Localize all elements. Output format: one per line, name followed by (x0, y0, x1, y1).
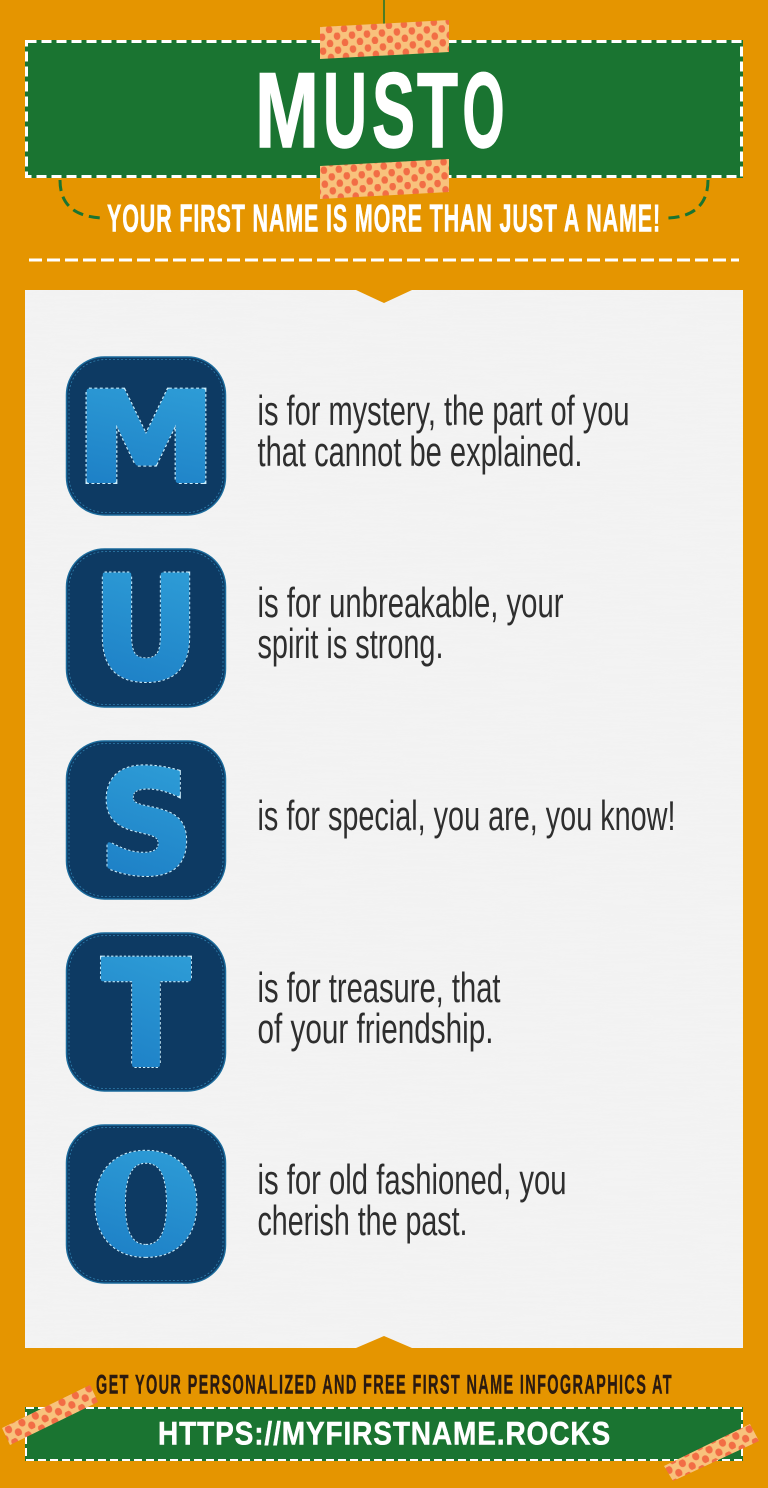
text: O line: cherish the past. (258, 1197, 468, 1244)
footer banner (25, 1407, 743, 1461)
title: O (462, 50, 504, 170)
panel: letters (25, 290, 743, 1348)
icon: letter M tile: M (76, 367, 216, 511)
row T (66, 930, 501, 1100)
title (255, 50, 504, 170)
row O (66, 1125, 566, 1285)
text: M line: that cannot be explained. (258, 428, 582, 475)
title: S (372, 50, 415, 170)
title banner (25, 40, 743, 178)
tape: footer left (2, 1385, 98, 1445)
header string (383, 0, 385, 26)
icon: letter T tile: T (102, 930, 190, 1100)
icon: letter S tile: S (99, 742, 194, 906)
row M (66, 357, 630, 515)
icon: letter U tile: U (92, 547, 200, 712)
tape: top (320, 20, 449, 59)
right dashed connector (668, 180, 708, 218)
icon: letter T tile: T (102, 930, 190, 1100)
icon: letter O tile: O (92, 1126, 200, 1285)
icon: letter S tile (66, 741, 226, 906)
row S (66, 741, 676, 906)
title: U (323, 50, 367, 170)
icon: letter U tile: U (92, 547, 200, 712)
text: O line: is for old fashioned, you (258, 1156, 566, 1203)
left dashed connector (60, 180, 103, 218)
icon: letter S tile: S (99, 742, 194, 906)
row U (66, 547, 564, 712)
title: M (255, 50, 319, 170)
dashed divider (29, 258, 739, 262)
text: T line: is for treasure, that (258, 964, 501, 1011)
footer url: HTTPS://MYFIRSTNAME.ROCKS (158, 1416, 611, 1452)
tape: footer right (664, 1424, 759, 1481)
text: U line: spirit is strong. (258, 620, 444, 667)
icon: letter O tile: O (92, 1126, 200, 1285)
text: T line: of your friendship. (258, 1005, 494, 1052)
icon: letter M tile: M (76, 367, 216, 511)
icon: letter T tile (66, 930, 226, 1100)
tape: bottom (320, 159, 449, 199)
title: T (417, 50, 458, 170)
text: U line: is for unbreakable, your (258, 579, 564, 626)
